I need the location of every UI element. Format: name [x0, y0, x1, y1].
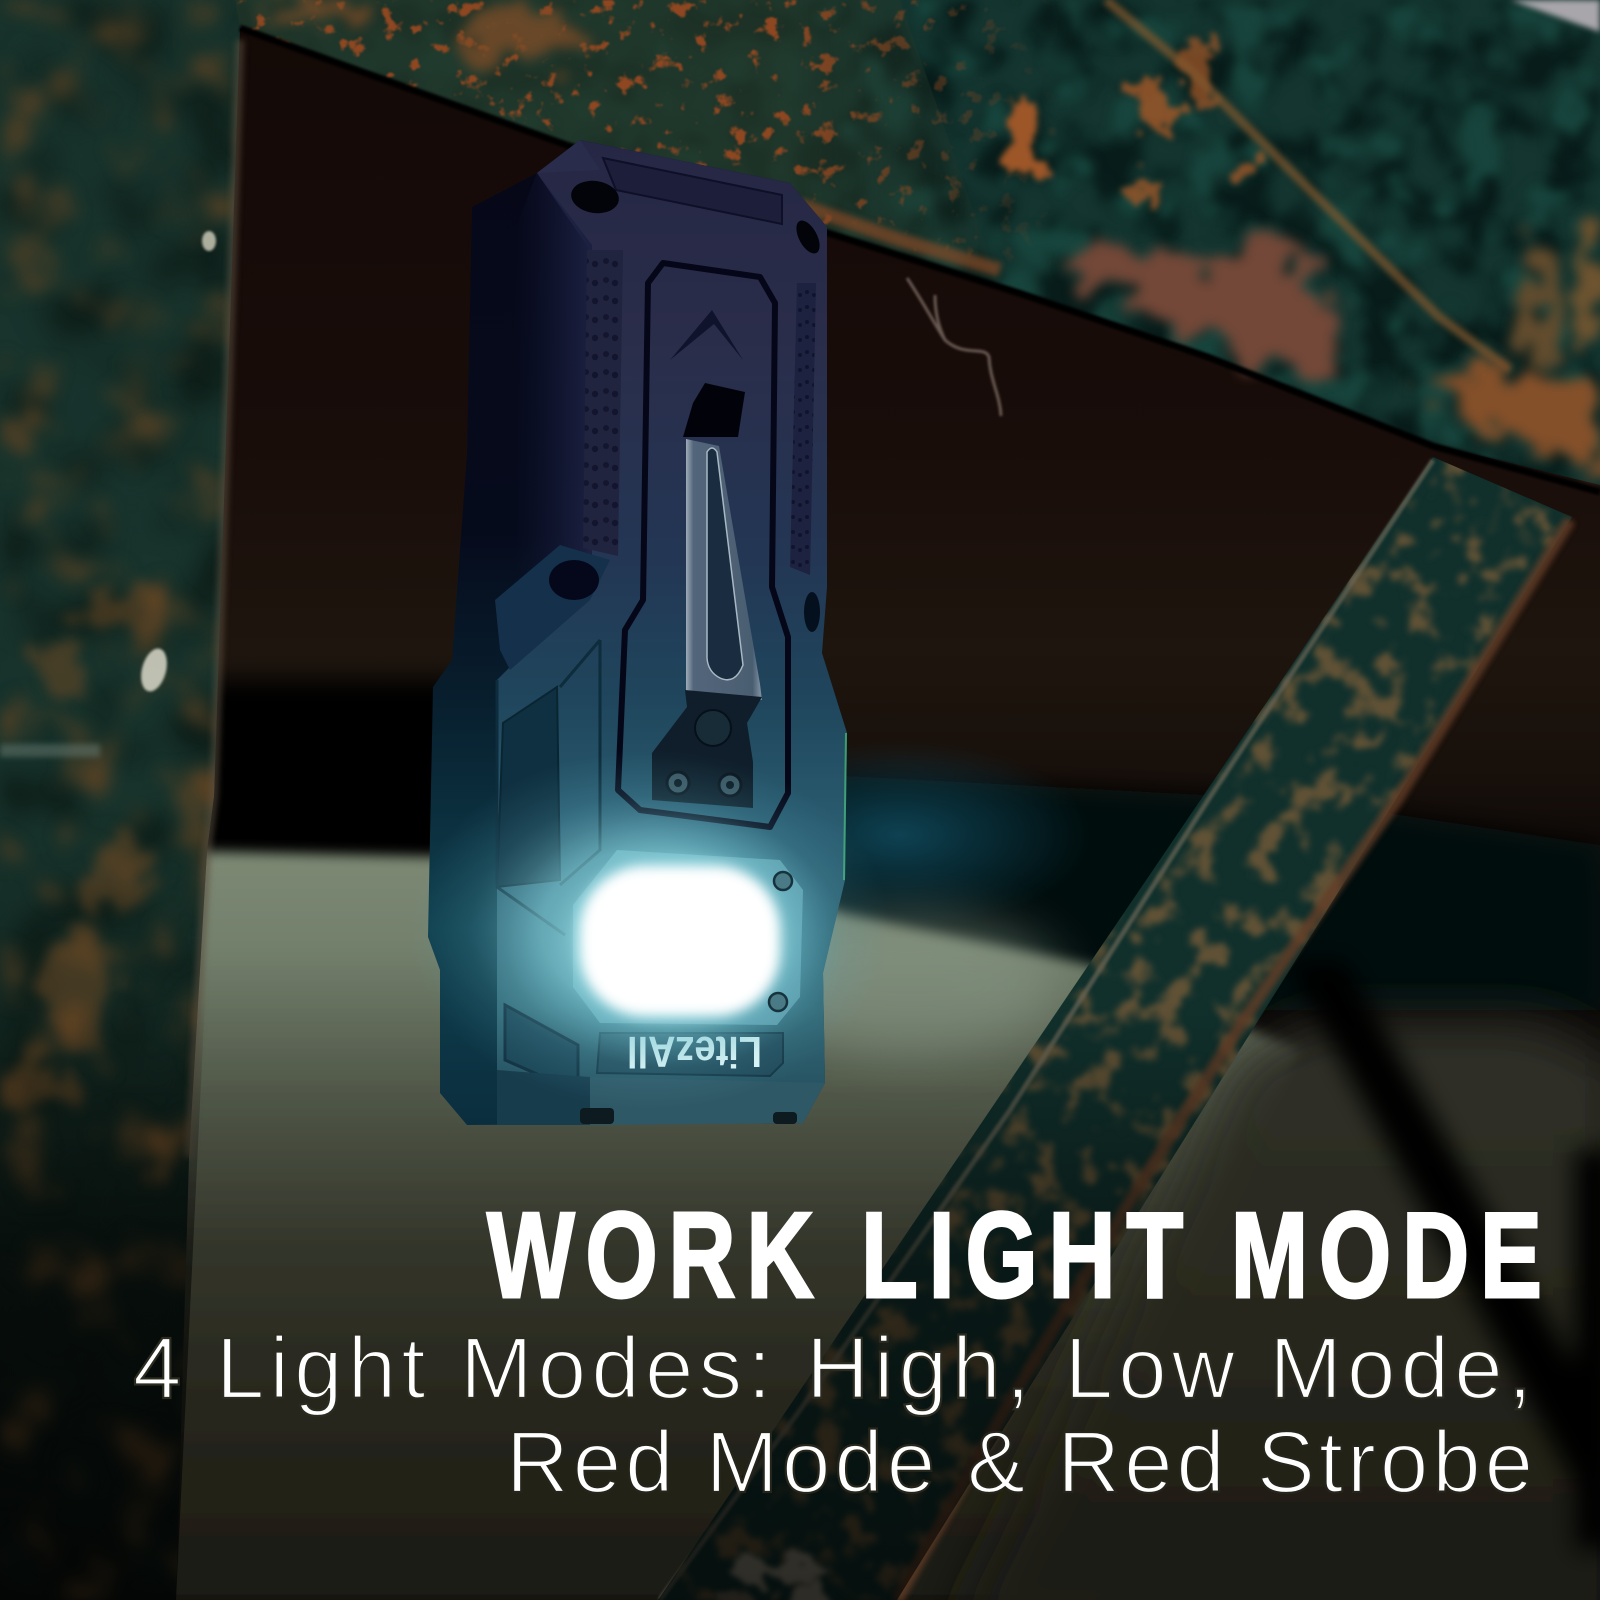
- headline: WORK LIGHT MODE: [487, 1187, 1542, 1323]
- strut crust at the base: [719, 1560, 832, 1600]
- clip screws: [667, 772, 741, 796]
- beam fine rust specks on the sharp left side: [237, 0, 1039, 259]
- strut light left edge: [660, 460, 1433, 1600]
- logo badge with brand text: LitezAll: [627, 1027, 762, 1076]
- diagonal strut: [658, 457, 1572, 1600]
- light housing: [573, 850, 803, 1025]
- beam top-left blurred rust: [260, 0, 590, 62]
- beam rust along edge: [800, 205, 1000, 270]
- metal belt clip: [686, 439, 762, 700]
- lens screws: [769, 872, 792, 1011]
- bottom lip: [590, 1077, 825, 1125]
- clip top block: [683, 383, 745, 437]
- side shading toward the back of the shell: [515, 173, 592, 645]
- left post: [0, 0, 250, 1600]
- belt clip slot: [707, 448, 743, 680]
- pale wall corner: [1510, 0, 1600, 32]
- subtitle line one: 4 Light Modes: High, Low Mode,: [133, 1320, 1532, 1417]
- beam rust patches: [1004, 40, 1255, 204]
- left dotted grip panel: [583, 250, 623, 556]
- chevron mark: [670, 310, 743, 360]
- clip recess outline: [618, 263, 788, 827]
- lower left diagonal shoulder: [495, 545, 610, 670]
- green side strip: [844, 733, 846, 880]
- dark shading on lower area: [658, 457, 1572, 1600]
- right dotted grip panel: [790, 283, 816, 575]
- flashlight device: [410, 140, 890, 1125]
- top slot recess: [603, 158, 782, 224]
- subtitle: [133, 1320, 1533, 1511]
- device front face: [497, 140, 847, 1125]
- beam long scratch: [1106, 0, 1510, 370]
- background: pale lit wall below the dark band: [130, 850, 1600, 1600]
- beam left olive tint: [235, 0, 948, 255]
- lower left recessed panel: [505, 1005, 578, 1092]
- cobweb: [907, 278, 1001, 416]
- bottom screws: [580, 1108, 797, 1124]
- lower left side panel: [497, 687, 560, 887]
- light glow halo: [410, 750, 890, 1110]
- subtitle line two: Red Mode & Red Strobe: [506, 1414, 1533, 1511]
- beam dark lower lip: [240, 28, 1600, 492]
- post rust trim edge: [189, 40, 240, 1157]
- mounting holes: [549, 178, 824, 632]
- background: blurred black diagonal beam shadow: [1285, 960, 1600, 1550]
- device shell silhouette: [428, 140, 847, 1125]
- large rust area lower right: [1060, 220, 1600, 470]
- post specular spots: [202, 231, 216, 251]
- strut rust right edge: [897, 520, 1570, 1600]
- clip base plate: [652, 690, 762, 808]
- top beam: [235, 0, 1600, 492]
- light core: [580, 866, 780, 1016]
